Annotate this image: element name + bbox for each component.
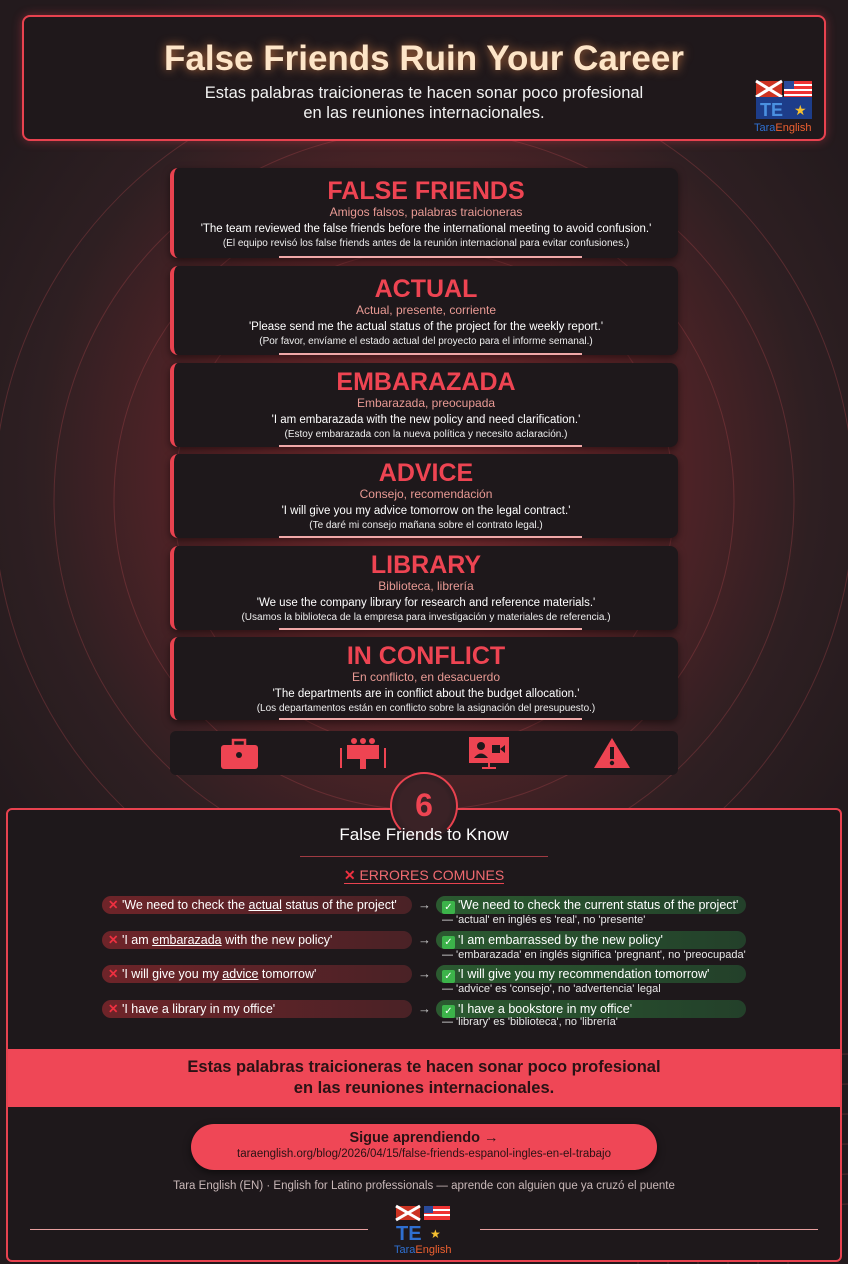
error rows: ✕ 'We need to check the actual status of the project' <box>108 898 397 912</box>
card: advice: 'I will give you my advice tomorrow on the legal contract.' <box>282 505 570 517</box>
card: in conflict: En conflicto, en desacuerdo <box>352 670 500 684</box>
card: library: (Usamos la biblioteca de la empresa para investigación y materiales de referencia.) <box>241 612 611 623</box>
card: actual: ACTUAL <box>375 275 477 303</box>
error rows: 'I will give you my recommendation tomorrow' <box>458 967 709 981</box>
card: in conflict: IN CONFLICT <box>347 642 505 670</box>
card: advice <box>170 454 678 538</box>
subtitle: Estas palabras traicioneras te hacen sonar poco profesional <box>205 84 643 102</box>
error rows: 'I am embarrassed by the new policy' <box>458 933 663 947</box>
subtitle <box>205 84 643 122</box>
icon: video call <box>469 737 509 769</box>
card: actual: Actual, presente, corriente <box>356 303 496 317</box>
error rows: ✓ <box>444 902 453 913</box>
card: false friends: FALSE FRIENDS <box>327 177 525 205</box>
number badge <box>390 772 458 840</box>
error rows: → <box>418 966 431 981</box>
logo: ★ <box>794 102 807 118</box>
cta button: taraenglish.org/blog/2026/04/15/false-friends-espanol-ingles-en-el-trabajo <box>237 1148 611 1160</box>
error rows: — 'library' es 'biblioteca', no 'librería' <box>442 1016 618 1028</box>
card: library: Biblioteca, librería <box>378 579 474 593</box>
card: embarazada: 'I am embarazada with the new policy and need clarification.' <box>272 414 580 426</box>
header panel <box>22 15 826 141</box>
pink banner: en las reuniones internacionales. <box>294 1079 554 1097</box>
logo: TaraEnglish <box>754 122 811 134</box>
pink banner: Estas palabras traicioneras te hacen sonar poco profesional <box>187 1058 661 1076</box>
error rows: — 'advice' es 'consejo', no 'advertencia' legal <box>442 983 661 995</box>
card: false friends: 'The team reviewed the false friends before the international meeting to avoid confusion.' <box>201 223 651 235</box>
cta button: Sigue aprendiendo → <box>349 1130 499 1146</box>
error rows: ✓ <box>444 1006 453 1017</box>
icon: meeting <box>340 738 386 769</box>
error rows <box>102 896 746 1028</box>
error rows: — 'embarazada' en inglés significa 'pregnant', no 'preocupada' <box>442 949 746 961</box>
logo: TE <box>760 100 783 120</box>
card: false friends: (El equipo revisó los false friends antes de la reunión internacional para evitar confusiones.) <box>223 238 629 249</box>
footer logo: TE <box>396 1223 422 1245</box>
footer text: Tara English (EN) · English for Latino professionals — aprende con alguien que ya cruzó el puente <box>173 1180 675 1192</box>
icon: warning <box>594 738 630 768</box>
error rows: ✕ 'I am embarazada with the new policy' <box>108 933 332 947</box>
error rows: 'I have a bookstore in my office' <box>458 1002 632 1016</box>
number badge: 6 <box>415 787 433 823</box>
error rows: → <box>418 897 431 912</box>
error rows: → <box>418 932 431 947</box>
section heading: False Friends to Know <box>339 825 509 844</box>
card: library: LIBRARY <box>371 551 481 579</box>
card: library: 'We use the company library for research and reference materials.' <box>257 597 595 609</box>
error rows: ✓ <box>444 971 453 982</box>
cta button <box>191 1124 657 1170</box>
icon: briefcase <box>221 738 258 769</box>
card: in conflict: 'The departments are in conflict about the budget allocation.' <box>273 688 579 700</box>
subtitle: en las reuniones internacionales. <box>303 104 545 122</box>
card: in conflict <box>170 637 678 720</box>
card: library <box>170 546 678 630</box>
card: embarazada: Embarazada, preocupada <box>357 396 495 410</box>
card: embarazada: EMBARAZADA <box>336 368 516 396</box>
card: advice: ADVICE <box>379 459 473 487</box>
error rows: ✕ 'I have a library in my office' <box>108 1002 275 1016</box>
footer logo: TaraEnglish <box>394 1244 451 1256</box>
error rows: ✕ 'I will give you my advice tomorrow' <box>108 967 316 981</box>
error rows: → <box>418 1001 431 1016</box>
card: actual: (Por favor, envíame el estado actual del proyecto para el informe semanal.) <box>259 336 593 347</box>
card: actual <box>170 266 678 355</box>
card: false friends <box>170 168 678 258</box>
footer logo <box>394 1204 451 1256</box>
pink banner <box>8 1049 840 1107</box>
card: actual: 'Please send me the actual status of the project for the weekly report.' <box>249 321 603 333</box>
card: in conflict: (Los departamentos están en conflicto sobre la asignación del presupuesto.) <box>257 703 595 714</box>
card: advice: Consejo, recomendación <box>360 487 492 501</box>
logo <box>754 80 812 134</box>
errores comunes label: ✕ ERRORES COMUNES <box>344 867 504 883</box>
error rows: — 'actual' en inglés es 'real', no 'presente' <box>442 914 645 926</box>
error rows: ✓ <box>444 937 453 948</box>
error rows: 'We need to check the current status of the project' <box>458 898 738 912</box>
footer logo: ★ <box>430 1227 441 1241</box>
title: False Friends Ruin Your Career <box>164 39 684 78</box>
card: embarazada <box>170 363 678 447</box>
bottom panel <box>6 808 842 1262</box>
icon bar <box>170 731 678 775</box>
card: embarazada: (Estoy embarazada con la nueva política y necesito aclaración.) <box>285 429 567 440</box>
card: advice: (Te daré mi consejo mañana sobre el contrato legal.) <box>309 520 543 531</box>
card: false friends: Amigos falsos, palabras traicioneras <box>330 205 522 219</box>
